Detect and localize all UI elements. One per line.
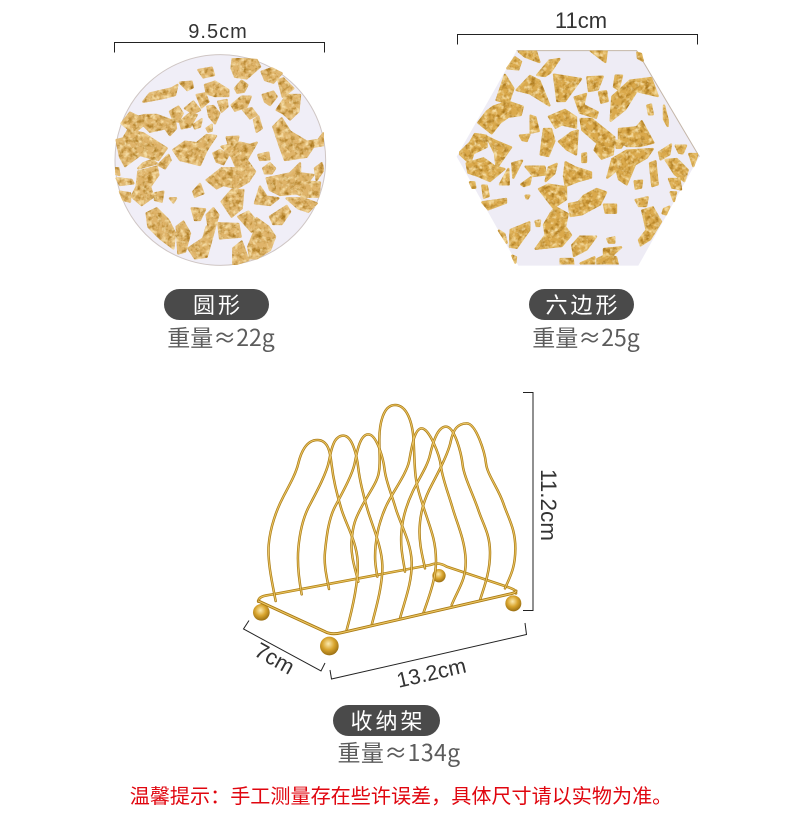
hoops outline [268, 405, 515, 630]
label pill: 收纳架: 收纳架 [350, 704, 426, 736]
dimension: 13.2cm [330, 623, 526, 693]
gold flakes in hexagon [459, 51, 698, 264]
weight: circle: 重量≈22g [167, 319, 275, 353]
dimension: 11cm [458, 8, 698, 44]
dimension: 7cm [244, 620, 325, 679]
front feet [320, 595, 521, 655]
dimension: 9.5cm [114, 21, 324, 52]
dimension: 13.2cm: 13.2cm [394, 654, 468, 693]
dimension: 9.5cm: 9.5cm [188, 21, 248, 43]
label pill: 收纳架 [333, 705, 440, 736]
hexagon coaster with gold flakes [457, 51, 699, 266]
label pill: 圆形 [164, 289, 269, 320]
weight: hexagon: 重量≈25g [532, 319, 640, 353]
rear feet [253, 569, 446, 621]
back and right rails [258, 563, 516, 602]
label pill: 六边形 [529, 289, 634, 320]
dimension: 11cm: 11cm [555, 8, 607, 33]
circle coaster with gold flakes [115, 55, 326, 265]
wire rack [253, 405, 521, 655]
label pill: 六边形: 六边形 [545, 288, 620, 320]
weight: rack: 重量≈134g [337, 734, 461, 768]
note: 温馨提示：手工测量存在些许误差，具体尺寸请以实物为准。 [130, 780, 672, 809]
front rails [258, 591, 516, 634]
dimension: 11.2cm: 11.2cm [536, 469, 561, 541]
label pill: 圆形: 圆形 [193, 288, 243, 320]
hoops highlight [268, 405, 515, 630]
dimension: 11.2cm [523, 392, 561, 610]
gold flakes in circle [115, 58, 324, 265]
dimension: 7cm: 7cm [250, 637, 299, 679]
